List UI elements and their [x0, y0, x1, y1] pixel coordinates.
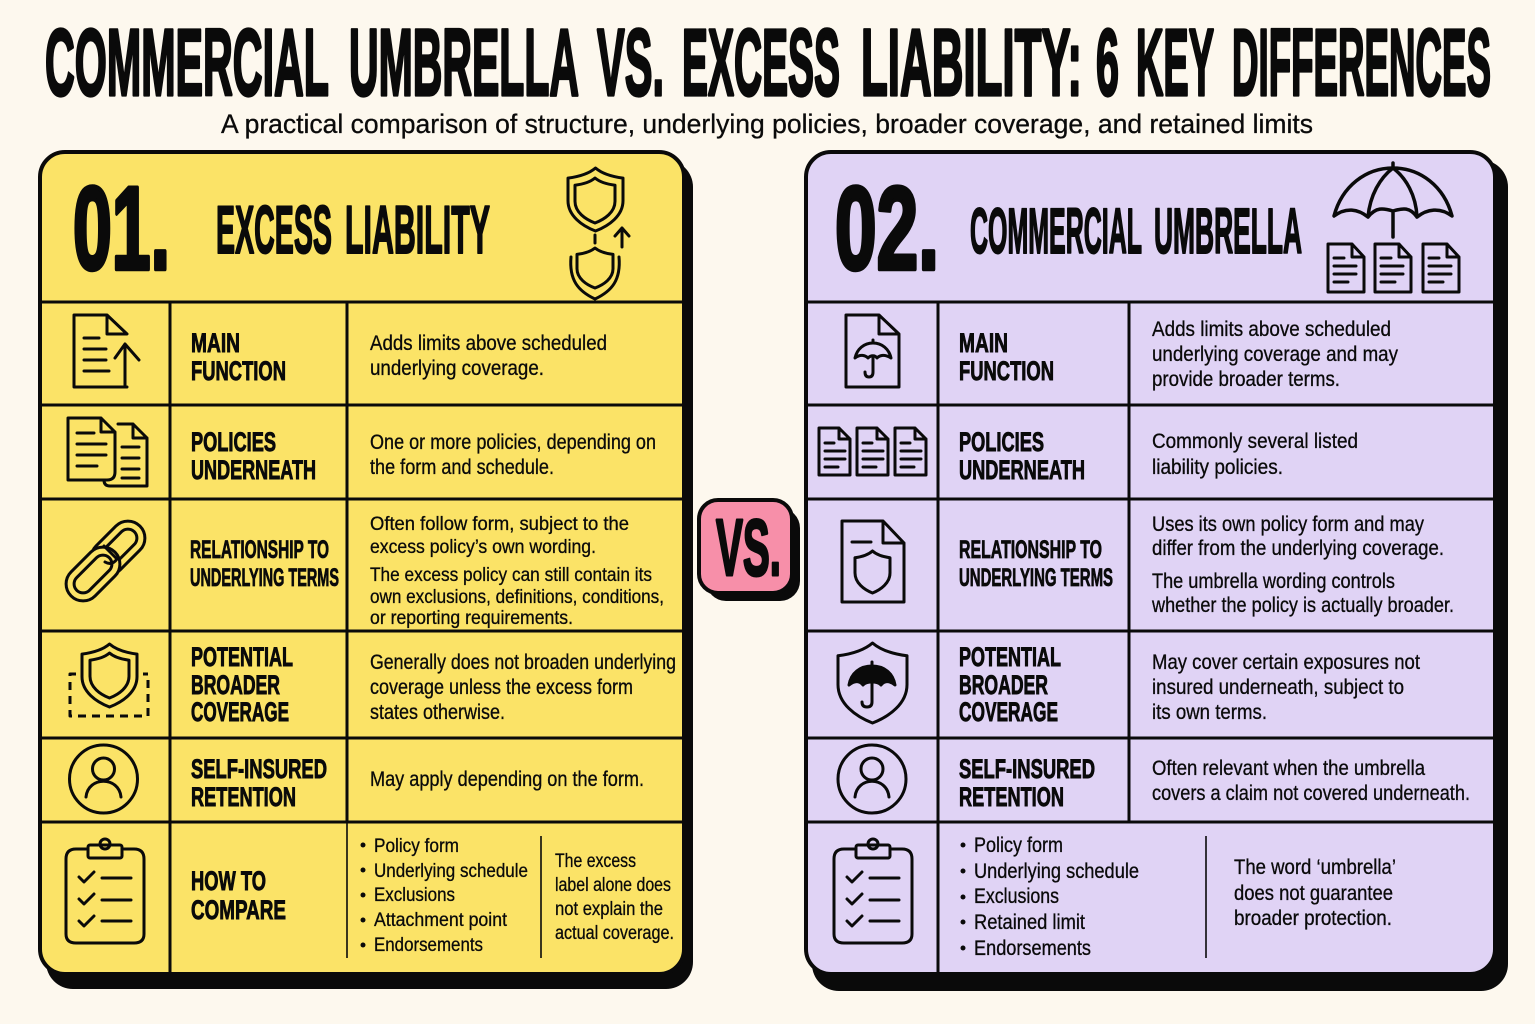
icon: checklist clipboard	[66, 839, 144, 943]
description	[1152, 318, 1398, 391]
panel: commercial umbrella	[806, 152, 1508, 991]
heading: excess liability: EXCESS	[216, 192, 332, 268]
checklist	[960, 834, 1139, 960]
heading: commercial umbrella: COMMERCIAL	[970, 195, 1142, 267]
icon: two documents	[68, 418, 147, 486]
label: SELF-INSURED	[959, 754, 1095, 784]
row: how to compare	[834, 834, 1396, 960]
row: relationship to underlying terms	[842, 513, 1454, 617]
row: relationship to underlying terms: UNDERLYING TERMS	[190, 564, 339, 592]
row: self-insured retention: RETENTION	[959, 782, 1064, 812]
row: how to compare: COMPARE	[191, 895, 286, 925]
checklist: Policy form	[974, 834, 1063, 857]
icon: stacked shields with arrow	[568, 168, 629, 299]
note: broader protection.	[1234, 907, 1392, 930]
description: underlying coverage and may	[1152, 343, 1398, 366]
row: relationship to underlying terms	[59, 513, 664, 629]
note: actual coverage.	[555, 922, 674, 944]
checklist: Exclusions	[974, 885, 1059, 908]
title: KEY	[1136, 10, 1214, 116]
title: UMBRELLA	[349, 10, 579, 116]
icon: shield in dashed frame	[70, 644, 148, 716]
vs badge	[699, 500, 800, 601]
icon: umbrella over three documents	[1328, 163, 1459, 292]
label: POLICIES	[191, 427, 276, 457]
title	[45, 10, 1491, 116]
vs badge: VS.	[716, 503, 781, 592]
icon: document with shield	[842, 521, 904, 602]
row: potential broader coverage: COVERAGE	[191, 697, 289, 727]
description: liability policies.	[1152, 456, 1283, 479]
description: states otherwise.	[370, 701, 505, 724]
icon: person in circle	[838, 745, 906, 813]
row: how to compare	[66, 835, 674, 956]
label: RELATIONSHIP TO	[190, 536, 329, 564]
description: Often relevant when the umbrella	[1152, 757, 1425, 780]
note	[555, 850, 674, 944]
checklist: Exclusions	[374, 884, 455, 906]
row: self-insured retention: RETENTION	[191, 782, 296, 812]
row: relationship to underlying terms: UNDERLYING TERMS	[959, 564, 1113, 592]
note: The excess	[555, 850, 636, 872]
description	[1152, 757, 1470, 805]
row: policies underneath	[68, 418, 656, 486]
note	[1234, 856, 1396, 930]
description: or reporting requirements.	[370, 607, 573, 629]
row: potential broader coverage: BROADER	[191, 670, 280, 700]
checklist: Attachment point	[374, 909, 508, 931]
row: main function: FUNCTION	[959, 356, 1054, 386]
panel: commercial umbrella: UMBRELLA	[1154, 195, 1302, 267]
description: the form and schedule.	[370, 456, 554, 479]
description	[370, 513, 664, 629]
title: 6	[1096, 10, 1119, 116]
description	[1152, 651, 1420, 724]
description: covers a claim not covered underneath.	[1152, 782, 1470, 805]
title: COMMERCIAL	[45, 10, 329, 116]
row: potential broader coverage	[70, 642, 676, 727]
title: VS.	[597, 10, 664, 116]
checklist: Policy form	[374, 835, 459, 857]
description: underlying coverage.	[370, 357, 544, 380]
description: differ from the underlying coverage.	[1152, 537, 1444, 560]
description: The umbrella wording controls	[1152, 570, 1395, 593]
icon: person in circle	[70, 745, 138, 813]
checklist: Endorsements	[974, 937, 1091, 960]
description: coverage unless the excess form	[370, 676, 633, 699]
icon: document with up arrow	[74, 315, 139, 387]
row: policies underneath	[819, 427, 1358, 485]
description: The excess policy can still contain its	[370, 564, 652, 586]
label: POTENTIAL	[959, 642, 1061, 672]
row: policies underneath: UNDERNEATH	[191, 455, 316, 485]
icon: chain link	[59, 514, 152, 608]
description: provide broader terms.	[1152, 368, 1340, 391]
description: whether the policy is actually broader.	[1151, 594, 1454, 617]
checklist: Underlying schedule	[974, 860, 1139, 883]
note: does not guarantee	[1234, 882, 1393, 905]
row: self-insured retention	[70, 745, 644, 813]
description	[370, 431, 656, 479]
subtitle: A practical comparison of structure, underlying policies, broader coverage, and retained limits	[221, 109, 1313, 139]
label: RELATIONSHIP TO	[959, 536, 1102, 564]
number 02: 02.	[835, 163, 939, 295]
row: self-insured retention	[838, 745, 1470, 813]
row: potential broader coverage	[838, 642, 1420, 727]
icon: three documents	[819, 428, 926, 475]
row: main function: FUNCTION	[191, 356, 286, 386]
label: HOW TO	[191, 866, 266, 896]
checklist: Retained limit	[974, 911, 1085, 934]
note: label alone does	[555, 874, 671, 896]
description: Often follow form, subject to the	[370, 513, 629, 535]
note: The word ‘umbrella’	[1234, 856, 1396, 879]
row: main function	[846, 315, 1398, 391]
description: Generally does not broaden underlying	[370, 651, 676, 674]
checklist	[360, 835, 528, 956]
description: own exclusions, definitions, conditions,	[370, 586, 664, 608]
description: Adds limits above scheduled	[1152, 318, 1391, 341]
description: May apply depending on the form.	[370, 768, 644, 791]
icon: checklist clipboard	[834, 839, 912, 943]
number 01: 01.	[73, 163, 170, 295]
description	[370, 651, 676, 724]
checklist: Endorsements	[374, 934, 483, 956]
description: May cover certain exposures not	[1152, 651, 1420, 674]
description: its own terms.	[1152, 701, 1267, 724]
row: policies underneath: UNDERNEATH	[959, 455, 1085, 485]
row: potential broader coverage: COVERAGE	[959, 697, 1058, 727]
description	[370, 332, 607, 380]
checklist: Underlying schedule	[374, 860, 528, 882]
description: Adds limits above scheduled	[370, 332, 607, 355]
label: SELF-INSURED	[191, 754, 327, 784]
description: insured underneath, subject to	[1152, 676, 1404, 699]
row: potential broader coverage: BROADER	[959, 670, 1048, 700]
title: EXCESS	[682, 10, 840, 116]
title: LIABILITY:	[861, 10, 1082, 116]
note: not explain the	[555, 898, 663, 920]
panel: excess liability: LIABILITY	[345, 192, 490, 268]
description: Commonly several listed	[1152, 430, 1358, 453]
description: Uses its own policy form and may	[1152, 513, 1424, 536]
description: One or more policies, depending on	[370, 431, 656, 454]
icon: document with umbrella	[846, 315, 899, 387]
label: MAIN	[959, 328, 1008, 358]
label: MAIN	[191, 328, 240, 358]
label: POTENTIAL	[191, 642, 293, 672]
panel: excess liability	[40, 152, 693, 989]
description	[1151, 513, 1454, 617]
row: main function	[74, 315, 607, 387]
description	[1152, 430, 1358, 479]
description: excess policy’s own wording.	[370, 536, 596, 558]
icon: shield with filled umbrella	[838, 643, 907, 723]
label: POLICIES	[959, 427, 1044, 457]
